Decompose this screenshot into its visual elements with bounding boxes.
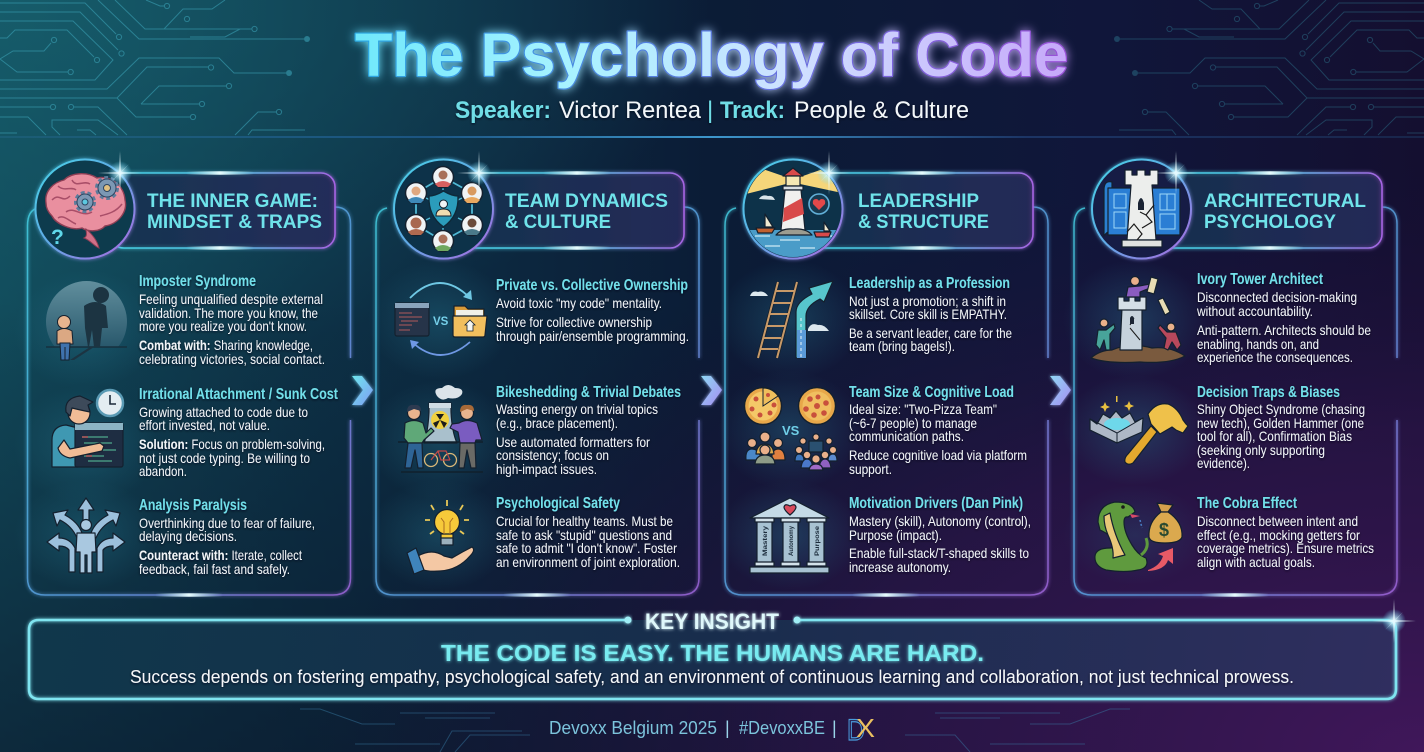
text: decision traps: Shiny Object Syndrome (chasing — [1197, 401, 1365, 417]
icon: person with large shadow — [46, 281, 127, 360]
text: analysis paralysis: Overthinking due to fear of failure, — [139, 515, 315, 531]
panel frame — [718, 207, 1048, 597]
text: motivation drivers: Enable full-stack/T-shaped skills to — [849, 545, 1029, 561]
item: imposter syndrome — [46, 273, 325, 367]
icon: brain with gears: ? — [51, 226, 64, 249]
footer — [549, 713, 875, 747]
section header: architectural psychology — [1092, 151, 1382, 258]
section header: leadership: LEADERSHIP — [858, 190, 979, 212]
text: decision traps: Decision Traps & Biases — [1197, 384, 1340, 401]
text: leadership as a profession — [849, 275, 1012, 354]
item: analysis paralysis — [47, 497, 315, 577]
text: leadership as a profession: Be a servant leader, care for the — [849, 325, 1012, 341]
text: irrational attachment: Solution: Focus on problem-solving, — [139, 436, 325, 452]
icon: person with diverging arrows — [47, 498, 125, 573]
text: team size and cognitive load: support. — [849, 461, 892, 477]
section header: the inner game — [36, 151, 335, 258]
insight body: Success depends on fostering empathy, psychological safety, and an environment of continuous learning and collaboration, not just technical prowess. — [130, 667, 1294, 687]
footer: | — [832, 718, 837, 738]
subtitle: speaker and track: Speaker: — [455, 97, 551, 124]
item: ivory tower architect — [1091, 271, 1371, 365]
icon: cobra and money bag — [1095, 502, 1182, 572]
text: ivory tower architect: Anti-pattern. Architects should be — [1197, 322, 1371, 338]
item: irrational attachment — [52, 386, 338, 479]
text: motivation drivers — [849, 495, 1031, 575]
item: motivation drivers — [750, 495, 1031, 575]
text: motivation drivers: Purpose (impact). — [849, 527, 942, 543]
text: bikeshedding: Bikeshedding & Trivial Debates — [496, 384, 681, 401]
text: cobra effect: align with actual goals. — [1197, 554, 1315, 570]
text: cobra effect: The Cobra Effect — [1197, 495, 1297, 512]
footer circuit traces — [300, 709, 1130, 752]
text: ivory tower architect: experience the consequences. — [1197, 349, 1353, 365]
section header: architectural psychology: ARCHITECTURAL — [1204, 190, 1366, 212]
icon: two people, nuclear plant and bike shed — [398, 385, 483, 472]
text: analysis paralysis — [139, 497, 315, 577]
panel frame — [368, 207, 699, 597]
text: ivory tower architect: without accountability. — [1196, 303, 1313, 319]
text: irrational attachment — [139, 386, 338, 479]
arrow: team dynamics to leadership — [701, 376, 722, 405]
panel: leadership — [718, 151, 1048, 597]
subtitle: speaker and track — [455, 97, 969, 124]
text: ivory tower architect: Disconnected decision-making — [1197, 289, 1357, 305]
panel: the inner game — [14, 151, 350, 597]
logo: devoxx: D — [847, 714, 865, 747]
text: bikeshedding: consistency; focus on — [496, 447, 609, 463]
icon: lighthouse — [744, 160, 845, 260]
item: team size and cognitive load — [744, 384, 1027, 477]
text: motivation drivers: increase autonomy. — [849, 559, 951, 575]
insight label: KEY INSIGHT — [645, 609, 780, 634]
text: bikeshedding: (e.g., brace placement). — [496, 415, 618, 431]
background circuit pattern top right — [1114, 0, 1424, 135]
text: team size and cognitive load: (~6-7 people) to manage — [849, 415, 977, 431]
text: psychological safety: Crucial for healthy teams. Must be — [496, 513, 673, 529]
icon: temple with three pillars: Autonomy — [788, 526, 795, 556]
panel frame — [14, 207, 350, 597]
text: imposter syndrome: Imposter Syndrome — [139, 273, 256, 290]
icon: ivory tower with figures — [1091, 276, 1185, 362]
section header: team dynamics — [394, 151, 684, 258]
icon: cobra and money bag: $ — [1159, 520, 1169, 540]
icon: ladder beside forking path — [750, 281, 833, 358]
text: cobra effect: coverage metrics). Ensure metrics — [1197, 540, 1374, 556]
text: imposter syndrome: celebrating victories, social contact. — [139, 351, 325, 367]
text: imposter syndrome: more you realize you don't know. — [139, 318, 307, 334]
text: leadership as a profession: team (bring bagels!). — [849, 338, 955, 354]
icon: temple with three pillars: Purpose — [814, 526, 821, 556]
section header: the inner game: MINDSET & TRAPS — [147, 211, 322, 233]
icon: temple with three pillars: Mastery — [762, 526, 769, 556]
text: team size and cognitive load — [849, 384, 1027, 477]
header divider — [0, 136, 1424, 138]
subtitle: speaker and track: People & Culture — [794, 97, 969, 124]
icon: light bulb over open hand — [407, 500, 474, 574]
text: private vs collective ownership: Strive for collective ownership — [496, 314, 652, 330]
subtitle: speaker and track: Track: — [720, 97, 785, 124]
subtitle: speaker and track: Victor Rentea — [559, 97, 702, 124]
logo: devoxx: X — [856, 713, 875, 743]
text: leadership as a profession: skillset. Core skill is EMPATHY. — [849, 306, 1007, 322]
text: irrational attachment: not just code typing. Be willing to — [139, 450, 310, 466]
text: bikeshedding: high-impact issues. — [496, 461, 597, 477]
text: cobra effect: Disconnect between intent and — [1197, 513, 1358, 529]
text: psychological safety — [496, 495, 680, 570]
text: analysis paralysis: Analysis Paralysis — [139, 497, 247, 514]
text: cobra effect — [1197, 495, 1374, 570]
text: analysis paralysis: Counteract with: Iterate, collect — [139, 547, 302, 563]
text: imposter syndrome — [139, 273, 325, 367]
text: psychological safety: safe to ask "stupid" questions and — [496, 527, 672, 543]
text: psychological safety: an environment of joint exploration. — [496, 554, 680, 570]
text: imposter syndrome: Feeling unqualified despite external — [139, 291, 323, 307]
insight heading: THE CODE IS EASY. THE HUMANS ARE HARD. — [441, 640, 984, 666]
arrow: leadership to architecture — [1050, 376, 1071, 405]
text: psychological safety: safe to admit "I don't know". Foster — [496, 540, 677, 556]
panel: architectural psychology — [1063, 151, 1397, 597]
icon: team network with shield — [394, 160, 493, 258]
text: irrational attachment: abandon. — [139, 463, 187, 479]
text: private vs collective ownership: Private vs. Collective Ownership — [496, 277, 688, 294]
text: bikeshedding: Wasting energy on trivial topics — [496, 401, 658, 417]
text: team size and cognitive load: Team Size & Cognitive Load — [849, 384, 1014, 401]
section header: team dynamics: & CULTURE — [505, 211, 611, 233]
item: private vs collective ownership — [395, 277, 689, 355]
text: private vs collective ownership — [496, 277, 689, 344]
insight box — [29, 599, 1416, 699]
section header: leadership — [744, 151, 1033, 260]
subtitle: speaker and track: | — [707, 97, 713, 124]
text: decision traps: evidence). — [1197, 455, 1250, 471]
text: motivation drivers: Motivation Drivers (Dan Pink) — [849, 495, 1023, 512]
text: motivation drivers: Mastery (skill), Autonomy (control), — [849, 513, 1031, 529]
arrow: inner game to team dynamics — [352, 376, 373, 405]
item: cobra effect — [1095, 495, 1374, 572]
text: ivory tower architect: Ivory Tower Architect — [1197, 271, 1323, 288]
icon: brain with gears — [36, 160, 134, 258]
text: team size and cognitive load: Reduce cognitive load via platform — [849, 447, 1027, 463]
text: leadership as a profession: Not just a promotion; a shift in — [849, 293, 1006, 309]
text: irrational attachment: Growing attached to code due to — [139, 404, 308, 420]
background circuit pattern top left — [0, 0, 310, 135]
section header: the inner game: THE INNER GAME: — [147, 190, 318, 212]
section header: team dynamics: TEAM DYNAMICS — [505, 190, 668, 212]
text: team size and cognitive load: communication paths. — [849, 428, 964, 444]
text: psychological safety: Psychological Safety — [496, 495, 620, 512]
text: decision traps: new tech), Golden Hammer (one — [1197, 415, 1364, 431]
icon: code window vs shared folder: VS — [433, 316, 449, 328]
text: ivory tower architect — [1196, 271, 1371, 365]
text: private vs collective ownership: Avoid toxic "my code" mentality. — [496, 295, 662, 311]
text: irrational attachment: Irrational Attachment / Sunk Cost — [139, 386, 338, 403]
key insight panel — [29, 599, 1416, 699]
icon: shiny trap and golden hammer — [1090, 396, 1188, 464]
icon: code window vs shared folder — [395, 283, 487, 355]
text: imposter syndrome: Combat with: Sharing knowledge, — [139, 337, 313, 353]
panel frame — [1063, 207, 1397, 597]
item: psychological safety — [407, 495, 680, 574]
text: bikeshedding: Use automated formatters for — [496, 434, 650, 450]
text: imposter syndrome: validation. The more you know, the — [139, 305, 318, 321]
section header: leadership: & STRUCTURE — [858, 211, 989, 233]
text: decision traps — [1197, 384, 1365, 471]
footer: Devoxx Belgium 2025 — [549, 718, 717, 738]
item: decision traps — [1090, 384, 1365, 471]
footer: #DevoxxBE — [739, 718, 825, 738]
footer: | — [725, 718, 730, 738]
icon: temple with three pillars — [750, 498, 829, 573]
text: analysis paralysis: delaying decisions. — [139, 528, 237, 544]
text: leadership as a profession: Leadership as a Profession — [849, 275, 1010, 292]
section header: architectural psychology: PSYCHOLOGY — [1204, 211, 1336, 233]
text: private vs collective ownership: through pair/ensemble programming. — [496, 328, 689, 344]
text: decision traps: tool for all), Confirmation Bias — [1197, 428, 1352, 444]
icon: cracked tower on blueprint — [1092, 160, 1191, 258]
icon: two pizzas vs team sizes: VS — [782, 423, 800, 438]
icon: two pizzas vs team sizes — [744, 388, 837, 470]
item: bikeshedding — [398, 384, 681, 477]
text: cobra effect: effect (e.g., mocking getters for — [1197, 527, 1360, 543]
panel: team dynamics — [368, 151, 699, 597]
title: The Psychology of Code — [355, 21, 1068, 89]
item: leadership as a profession — [750, 275, 1012, 358]
text: ivory tower architect: enabling, hands on, and — [1197, 336, 1319, 352]
icon: developer hugging code with clock — [52, 390, 123, 467]
text: irrational attachment: effort invested, not value. — [139, 417, 270, 433]
text: analysis paralysis: feedback, fail fast and safely. — [139, 561, 290, 577]
text: team size and cognitive load: Ideal size: "Two-Pizza Team" — [849, 401, 997, 417]
text: bikeshedding — [496, 384, 681, 477]
text: decision traps: (seeking only supporting — [1197, 442, 1325, 458]
